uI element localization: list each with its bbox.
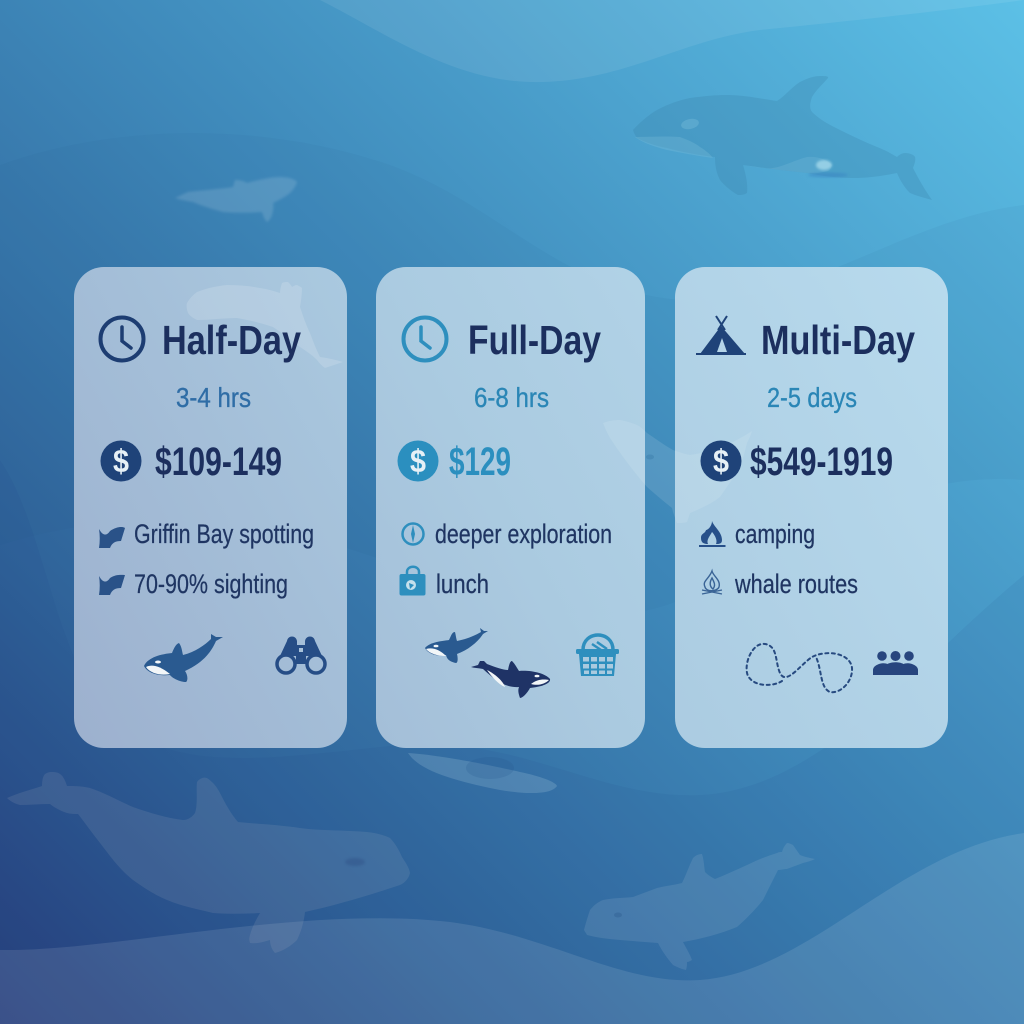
icon: tent <box>696 316 746 355</box>
full-day price <box>398 440 511 484</box>
ghost whale in half-day panel <box>187 282 343 368</box>
full-day features <box>400 519 612 599</box>
multi-day duration: 2-5 days <box>767 382 857 413</box>
icon: whale tail <box>99 527 125 548</box>
icon: clock <box>100 318 144 360</box>
icon: dollar coin: $ <box>713 443 729 479</box>
icon: compass <box>402 524 424 544</box>
multi-day features: whale routes <box>734 569 858 599</box>
icon: whale tail <box>99 575 125 595</box>
multi-day heading <box>696 316 915 363</box>
full-day duration: 6-8 hrs <box>474 382 549 413</box>
half-day price <box>100 440 282 484</box>
ghost whale over center and right panels <box>603 420 752 523</box>
half-day heading <box>100 317 301 363</box>
icon: dollar coin: $ <box>410 443 426 479</box>
half-day features <box>99 519 314 599</box>
multi-day features: camping <box>735 519 815 549</box>
whale silhouette: bottom right <box>584 843 815 970</box>
icon: orca <box>144 634 223 682</box>
half-day price: $109-149 <box>155 440 282 484</box>
icon: clock <box>404 318 446 360</box>
multi-day features <box>699 519 858 599</box>
icon: lunch bag <box>400 567 426 596</box>
icon: dollar coin <box>100 440 142 482</box>
whale silhouette: under center card <box>408 753 557 793</box>
icon: group of people <box>873 651 918 675</box>
full-day features: deeper exploration <box>435 519 612 549</box>
half-day duration: 3-4 hrs <box>176 382 251 413</box>
half-day features: Griffin Bay spotting <box>134 519 314 549</box>
multi-day price <box>700 440 893 484</box>
whale silhouette: bottom left <box>7 772 410 953</box>
panel: full-day <box>376 267 645 748</box>
full-day price: $129 <box>449 440 511 484</box>
multi-day price: $549-1919 <box>750 440 893 484</box>
icon: two orcas <box>425 628 550 698</box>
icon: dollar coin <box>700 440 742 482</box>
full-day features: lunch <box>436 569 489 599</box>
whale silhouette: top left <box>175 177 297 222</box>
panel: half-day <box>74 267 347 748</box>
icon: dollar coin: $ <box>113 443 129 479</box>
full-day heading: Full-Day <box>468 317 601 363</box>
icon: flame <box>699 521 726 547</box>
icon: campfire <box>702 571 722 594</box>
half-day features: 70-90% sighting <box>134 569 288 599</box>
half-day heading: Half-Day <box>162 317 301 363</box>
full-day heading <box>404 317 601 363</box>
panel: multi-day <box>675 267 948 748</box>
multi-day heading: Multi-Day <box>761 317 915 363</box>
icon: binoculars <box>277 636 325 673</box>
icon: picnic basket <box>576 635 619 676</box>
whale silhouette: top right <box>633 76 932 200</box>
icon: dashed route <box>747 644 852 692</box>
